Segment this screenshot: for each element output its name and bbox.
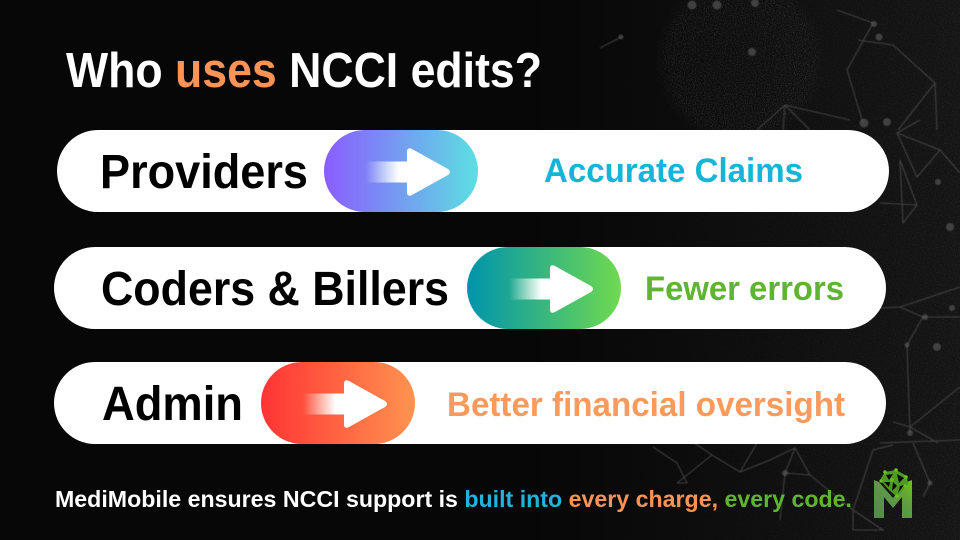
- panel: providers: [57, 130, 889, 212]
- gradient pill with arrow: [261, 362, 415, 444]
- benefit: better financial oversight: Better financial oversight: [447, 386, 845, 424]
- panel: coders and billers: [54, 247, 886, 329]
- label: admin: Admin: [102, 378, 243, 431]
- benefit: accurate claims: Accurate Claims: [544, 152, 803, 190]
- gradient pill with arrow: [467, 247, 621, 329]
- panel: admin: [54, 362, 886, 444]
- icon: MediMobile logo: [874, 468, 912, 518]
- benefit: fewer errors: Fewer errors: [645, 270, 844, 308]
- footer statement: MediMobile ensures NCCI support is built into every charge, every code.: [55, 486, 852, 512]
- label: coders and billers: Coders & Billers: [101, 263, 449, 316]
- title: Who uses NCCI edits?: [66, 44, 542, 98]
- gradient pill with arrow: [324, 130, 478, 212]
- background network texture: [600, 0, 960, 540]
- label: providers: Providers: [100, 146, 308, 199]
